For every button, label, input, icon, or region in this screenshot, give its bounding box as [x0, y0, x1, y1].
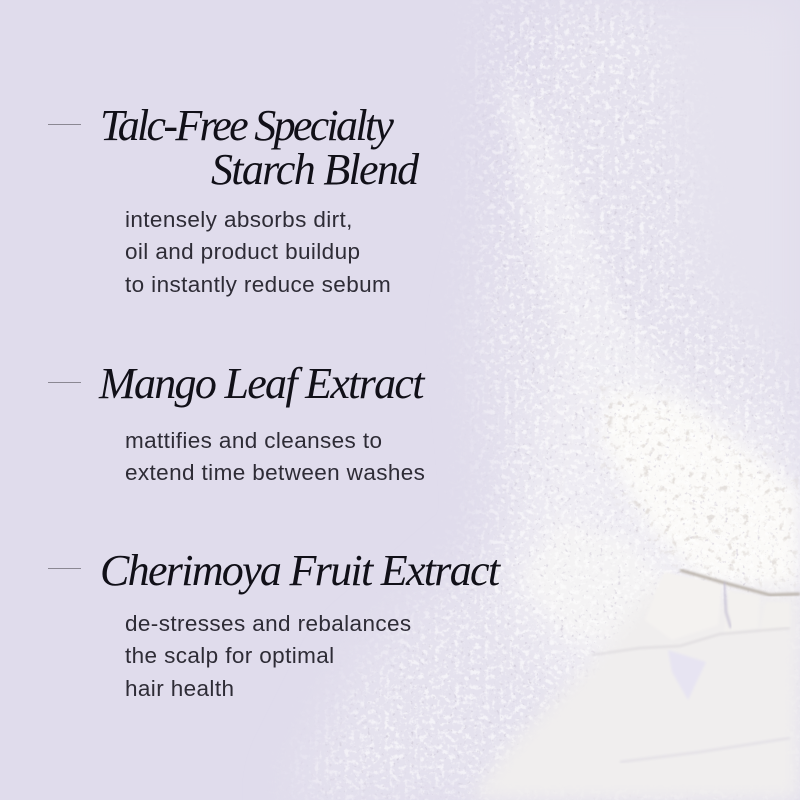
text: cherimoya description: the scalp for optimal	[125, 643, 335, 668]
heading: Talc-Free Specialty Starch Blend: Talc-Free Specialty	[100, 101, 391, 150]
heading: Mango Leaf Extract: Mango Leaf Extract	[99, 359, 423, 408]
pressed powder cake	[470, 570, 800, 800]
heading rule 1	[48, 124, 81, 125]
heading rule 2	[48, 382, 81, 383]
background: powder texture	[304, 0, 800, 800]
text: starch blend description	[125, 207, 391, 297]
text: starch blend description: to instantly reduce sebum	[125, 272, 391, 297]
text: cherimoya description: de-stresses and rebalances	[125, 611, 412, 636]
text: starch blend description: intensely absorbs dirt,	[125, 207, 353, 232]
text: starch blend description: oil and product buildup	[125, 239, 360, 264]
text: cherimoya description	[125, 611, 412, 701]
heading: Talc-Free Specialty Starch Blend	[100, 101, 420, 194]
text: mango description	[125, 428, 425, 485]
heading rule 3	[48, 568, 81, 569]
heading: Talc-Free Specialty Starch Blend: Starch Blend	[211, 145, 417, 194]
text: cherimoya description: hair health	[125, 676, 234, 701]
heading: Cherimoya Fruit Extract: Cherimoya Fruit Extract	[100, 546, 498, 595]
text: mango description: extend time between washes	[125, 460, 425, 485]
text: mango description: mattifies and cleanses to	[125, 428, 382, 453]
